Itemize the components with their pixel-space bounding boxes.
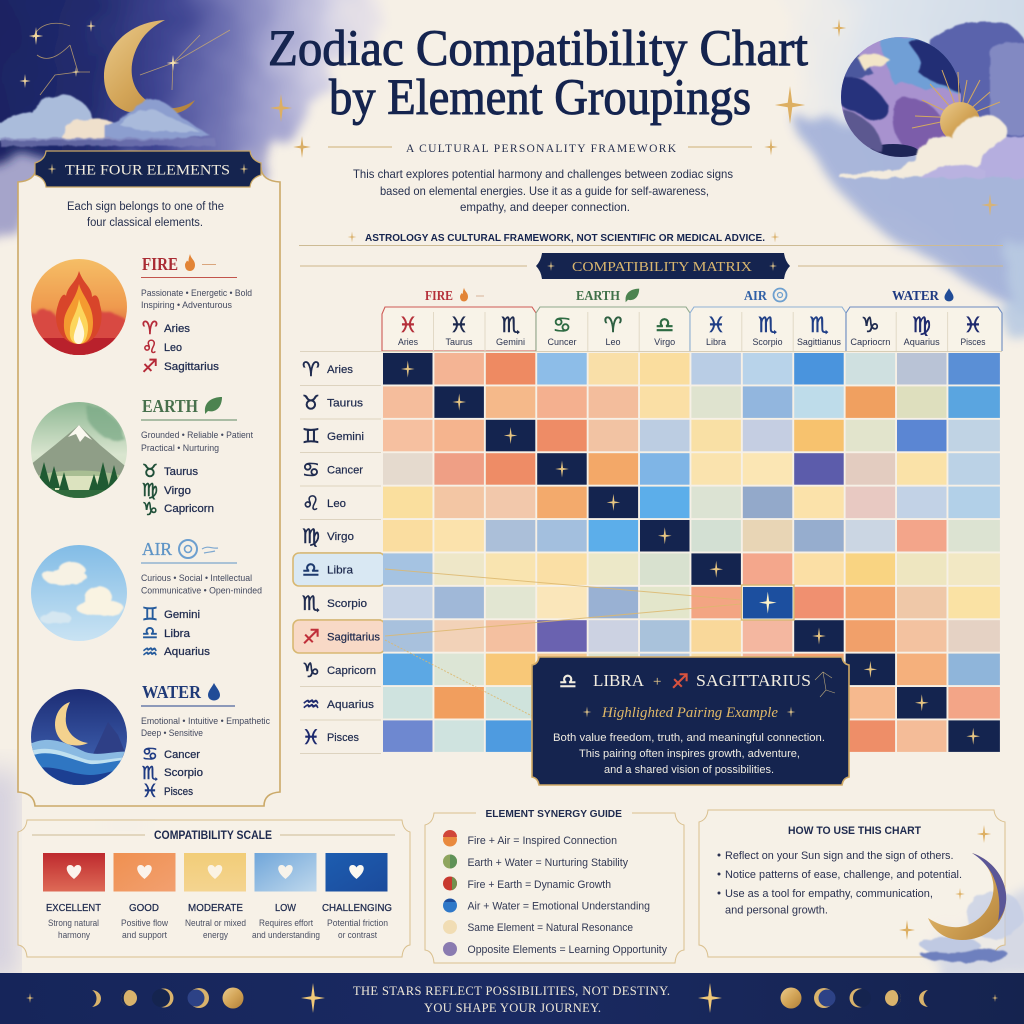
- matrix: row labels: Cancer: [327, 464, 363, 476]
- synergy list: Opposite Elements = Learning Opportunity: [468, 944, 668, 956]
- title: Zodiac Compatibility Chart: [268, 21, 808, 77]
- matrix: column headers: ♍︎: [912, 313, 931, 337]
- synergy list: [443, 830, 668, 956]
- element block: earth: Taurus: [164, 466, 198, 478]
- matrix: row labels: Libra: [327, 564, 354, 576]
- synergy list: Fire + Air = Inspired Connection: [468, 835, 617, 847]
- legend: good: Positive flow: [121, 918, 168, 928]
- legend: challenging: or contrast: [338, 930, 377, 940]
- panel: compatibility scale: [18, 820, 410, 957]
- element block: water: ♋︎: [142, 744, 158, 765]
- element block: air: Gemini: [164, 609, 200, 621]
- element block: earth: Capricorn: [164, 503, 214, 515]
- element block: earth: [141, 396, 253, 520]
- element block: fire: ♐︎: [142, 356, 158, 377]
- icon: moon phases right: [780, 988, 928, 1008]
- legend: moderate: energy: [203, 930, 228, 940]
- matrix: row labels: Aquarius: [327, 699, 375, 711]
- element block: earth: ♑︎: [142, 499, 158, 520]
- footer band: [0, 973, 1024, 1024]
- legend: excellent: Strong natural: [48, 918, 99, 928]
- matrix: column headers: Scorpio: [752, 337, 783, 347]
- callout: highlighted pairing example: +: [653, 674, 661, 690]
- legend: excellent: harmony: [58, 930, 90, 940]
- element block: fire: ♈︎: [142, 318, 158, 339]
- matrix: row labels: Scorpio: [327, 598, 367, 610]
- footer message: YOU SHAPE YOUR JOURNEY.: [424, 1001, 601, 1015]
- matrix: column headers: ♓︎: [399, 313, 417, 337]
- element block: earth: Virgo: [164, 485, 191, 497]
- legend: good: and support: [122, 930, 167, 940]
- matrix: row labels: ♎︎: [302, 558, 320, 582]
- callout: highlighted pairing example: This pairing often inspires growth, adventure,: [579, 748, 800, 760]
- matrix: row labels: ♊︎: [302, 424, 320, 448]
- element block: water: Emotional • Intuitive • Empathetic: [141, 716, 270, 726]
- matrix: row labels: ♋︎: [302, 458, 320, 482]
- element block: fire: ♌︎: [142, 337, 158, 358]
- matrix: row labels: ♐︎: [302, 624, 320, 648]
- callout: highlighted pairing example: Both value freedom, truth, and meaningful connection.: [553, 732, 825, 744]
- element block: air: AIR: [142, 539, 172, 559]
- illustration: cosmic sphere, sun and cloud top-right: [270, 19, 1024, 216]
- matrix: row labels: ♒︎: [302, 692, 320, 716]
- usage bullets: [718, 850, 962, 916]
- matrix: column headers: ♑︎: [861, 313, 880, 337]
- legend: good: GOOD: [129, 902, 159, 914]
- matrix: row labels: ♌︎: [302, 491, 320, 515]
- callout: highlighted pairing example: LIBRA: [593, 671, 644, 690]
- intro text: based on elemental energies. Use it as a guide for self-awareness,: [380, 184, 709, 198]
- usage bullets: Notice patterns of ease, challenge, and potential.: [725, 869, 962, 881]
- legend: low: Requires effort: [259, 918, 313, 928]
- usage bullets: Use as a tool for empathy, communication,: [725, 888, 933, 900]
- title: [268, 21, 808, 126]
- element block: water: Scorpio: [164, 767, 203, 779]
- synergy list: Air + Water = Emotional Understanding: [468, 900, 650, 912]
- matrix: column headers: ♎︎: [655, 313, 674, 337]
- matrix: row labels: Aries: [327, 364, 354, 376]
- element block: fire: Aries: [164, 323, 191, 335]
- element block: earth: Practical • Nurturing: [141, 443, 219, 453]
- footer message: [353, 984, 670, 1015]
- element block: water: Pisces: [164, 786, 193, 798]
- matrix: row labels: Taurus: [327, 398, 364, 410]
- matrix: column headers: Capriocrn: [850, 337, 891, 347]
- element block: air: ♎︎: [142, 623, 158, 644]
- matrix: element group headers: FIRE: [425, 288, 453, 303]
- matrix: column headers: ♓︎: [450, 313, 468, 337]
- panel: how to use this chart: HOW TO USE THIS CHART: [788, 825, 921, 837]
- matrix: row labels: Pisces: [327, 732, 359, 744]
- panel: element synergy guide: ELEMENT SYNERGY GUIDE: [486, 808, 622, 820]
- matrix: column headers: ♓︎: [964, 313, 982, 337]
- callout: highlighted pairing example: ♐︎: [671, 669, 689, 693]
- matrix: row labels: ♏︎: [302, 591, 320, 615]
- banner: compatibility matrix: [300, 253, 1003, 279]
- matrix: element group headers: AIR: [744, 288, 767, 303]
- subtitle: A CULTURAL PERSONALITY FRAMEWORK: [406, 143, 677, 155]
- element block: fire: Passionate • Energetic • Bold: [141, 288, 252, 298]
- matrix: diagonal star markers: [401, 360, 980, 745]
- callout: highlighted pairing example: and a shared vision of possibilities.: [604, 764, 774, 776]
- matrix: column headers: ♋︎: [553, 313, 571, 337]
- callout: highlighted pairing example: Highlighted Pairing Example: [601, 705, 778, 721]
- matrix: column headers: ♏︎: [758, 313, 777, 337]
- legend: challenging: [322, 853, 392, 940]
- icon: fire circle: [30, 259, 130, 360]
- legend: low: and understanding: [252, 930, 320, 940]
- element block: fire: Inspiring • Adventurous: [141, 300, 232, 310]
- element block: water: [141, 682, 270, 802]
- matrix: row labels: Capricorn: [327, 665, 376, 677]
- illustration: small crescent and clouds: [899, 825, 1023, 962]
- icon: moon phases left: [92, 988, 244, 1008]
- matrix: element group headers: WATER: [892, 288, 939, 303]
- matrix: row labels: ♈︎: [302, 357, 320, 381]
- highlighted cell: libra and sagittarius: [742, 585, 794, 620]
- legend: challenging: CHALLENGING: [322, 902, 392, 914]
- element block: air: [141, 539, 262, 663]
- panel intro text: Each sign belongs to one of the: [67, 201, 224, 213]
- element block: air: Curious • Social • Intellectual: [141, 573, 252, 583]
- matrix: column headers: ♏︎: [810, 313, 829, 337]
- matrix: column headers: Cuncer: [548, 337, 577, 347]
- matrix: column headers: Leo: [606, 337, 621, 347]
- matrix: row labels: Gemini: [327, 431, 364, 443]
- element block: water: ♓︎: [142, 781, 158, 802]
- title: by Element Groupings: [329, 70, 751, 126]
- matrix: row labels: ♍︎: [302, 524, 320, 548]
- matrix: column headers: Pisces: [960, 337, 986, 347]
- matrix: column headers: ♈︎: [604, 313, 622, 337]
- element block: water: Cancer: [164, 749, 200, 761]
- matrix: column headers: ♏︎: [501, 313, 520, 337]
- intro text: [353, 167, 733, 214]
- element block: air: Communicative • Open-minded: [141, 586, 262, 596]
- legend: low: [252, 853, 320, 940]
- panel: element synergy guide: [425, 808, 684, 963]
- matrix: column headers: Gemini: [496, 337, 525, 347]
- callout: highlighted pairing example: [532, 657, 849, 785]
- usage bullets: and personal growth.: [725, 904, 828, 916]
- legend: moderate: Neutral or mixed: [185, 918, 246, 928]
- icon: footer stars: [26, 983, 998, 1013]
- element block: fire: FIRE: [142, 254, 178, 274]
- element block: air: ♒︎: [142, 642, 158, 663]
- banner: the four elements: THE FOUR ELEMENTS: [65, 162, 230, 178]
- subtitle: [293, 136, 778, 158]
- panel intro text: [67, 201, 224, 229]
- element block: earth: EARTH: [142, 396, 198, 416]
- matrix: row labels: Sagittarius: [327, 632, 380, 644]
- matrix: compatibility cells: [383, 353, 1000, 752]
- legend: excellent: [43, 853, 105, 940]
- matrix: element group headers: [425, 288, 954, 303]
- legend: moderate: [184, 853, 246, 940]
- matrix: row labels: Leo: [327, 498, 346, 510]
- element block: earth: Grounded • Reliable • Patient: [141, 430, 253, 440]
- usage bullets: Reflect on your Sun sign and the sign of others.: [725, 850, 954, 862]
- matrix: row labels: ♑︎: [302, 658, 320, 682]
- matrix: column headers: Aries: [398, 337, 419, 347]
- icon: air circle: [31, 545, 127, 641]
- disclaimer: [299, 232, 1003, 246]
- matrix: column headers: Aquarius: [904, 337, 940, 347]
- matrix: row labels: [293, 352, 385, 754]
- element block: fire: [141, 254, 252, 377]
- legend: low: LOW: [275, 902, 296, 914]
- element block: air: Libra: [164, 628, 191, 640]
- panel: compatibility scale: COMPATIBILITY SCALE: [154, 830, 272, 842]
- intro text: This chart explores potential harmony and challenges between zodiac signs: [353, 167, 733, 181]
- element block: air: ♊︎: [142, 604, 158, 625]
- element block: fire: Sagittarius: [164, 361, 220, 373]
- element block: fire: Leo: [164, 342, 182, 354]
- synergy list: Earth + Water = Nurturing Stability: [468, 857, 629, 869]
- legend: moderate: MODERATE: [188, 902, 243, 914]
- footer message: THE STARS REFLECT POSSIBILITIES, NOT DESTINY.: [353, 984, 670, 998]
- element block: water: ♏︎: [142, 763, 158, 784]
- matrix: column headers: ♓︎: [707, 313, 725, 337]
- matrix: column headers: Virgo: [654, 337, 675, 347]
- matrix: row labels: ♉︎: [302, 390, 320, 414]
- panel: the four elements: [18, 151, 280, 806]
- element block: air: Aquarius: [164, 646, 211, 658]
- matrix: column headers: [382, 307, 1002, 352]
- matrix: column headers: Libra: [706, 337, 726, 347]
- legend: excellent: EXCELLENT: [46, 902, 102, 914]
- banner: compatibility matrix: COMPATIBILITY MATRIX: [572, 259, 752, 274]
- intro text: empathy, and deeper connection.: [460, 200, 630, 214]
- synergy list: Fire + Earth = Dynamic Growth: [468, 879, 611, 891]
- panel intro text: four classical elements.: [87, 217, 203, 229]
- callout: highlighted pairing example: ♎︎: [559, 669, 577, 693]
- matrix: row labels: ♓︎: [302, 725, 320, 749]
- synergy list: Same Element = Natural Resonance: [468, 922, 633, 934]
- element block: earth: ♉︎: [142, 461, 158, 482]
- banner: the four elements: [35, 151, 261, 187]
- panel: how to use this chart: [699, 810, 1023, 962]
- element block: water: Deep • Sensitive: [141, 728, 203, 738]
- highlight: sagittarius label: [293, 620, 385, 653]
- illustration: crescent moon and constellations top-left: [0, 20, 230, 146]
- matrix: row labels: Virgo: [327, 531, 354, 543]
- icon: earth circle: [31, 402, 127, 498]
- matrix: element group headers: EARTH: [576, 288, 620, 303]
- matrix: column headers: Taurus: [446, 337, 473, 347]
- highlight: libra label: [293, 553, 385, 586]
- legend: challenging: Potential friction: [327, 918, 388, 928]
- element block: earth: ♍︎: [142, 480, 158, 501]
- matrix: column headers: Sagittianus: [797, 337, 842, 347]
- disclaimer: ASTROLOGY AS CULTURAL FRAMEWORK, NOT SCIENTIFIC OR MEDICAL ADVICE.: [365, 232, 765, 244]
- icon: water circle: [31, 689, 127, 785]
- callout: highlighted pairing example: SAGITTARIUS: [696, 671, 811, 690]
- legend: good: [114, 853, 176, 940]
- connector lines: highlighted pairing: [385, 569, 741, 716]
- element block: water: WATER: [142, 682, 202, 702]
